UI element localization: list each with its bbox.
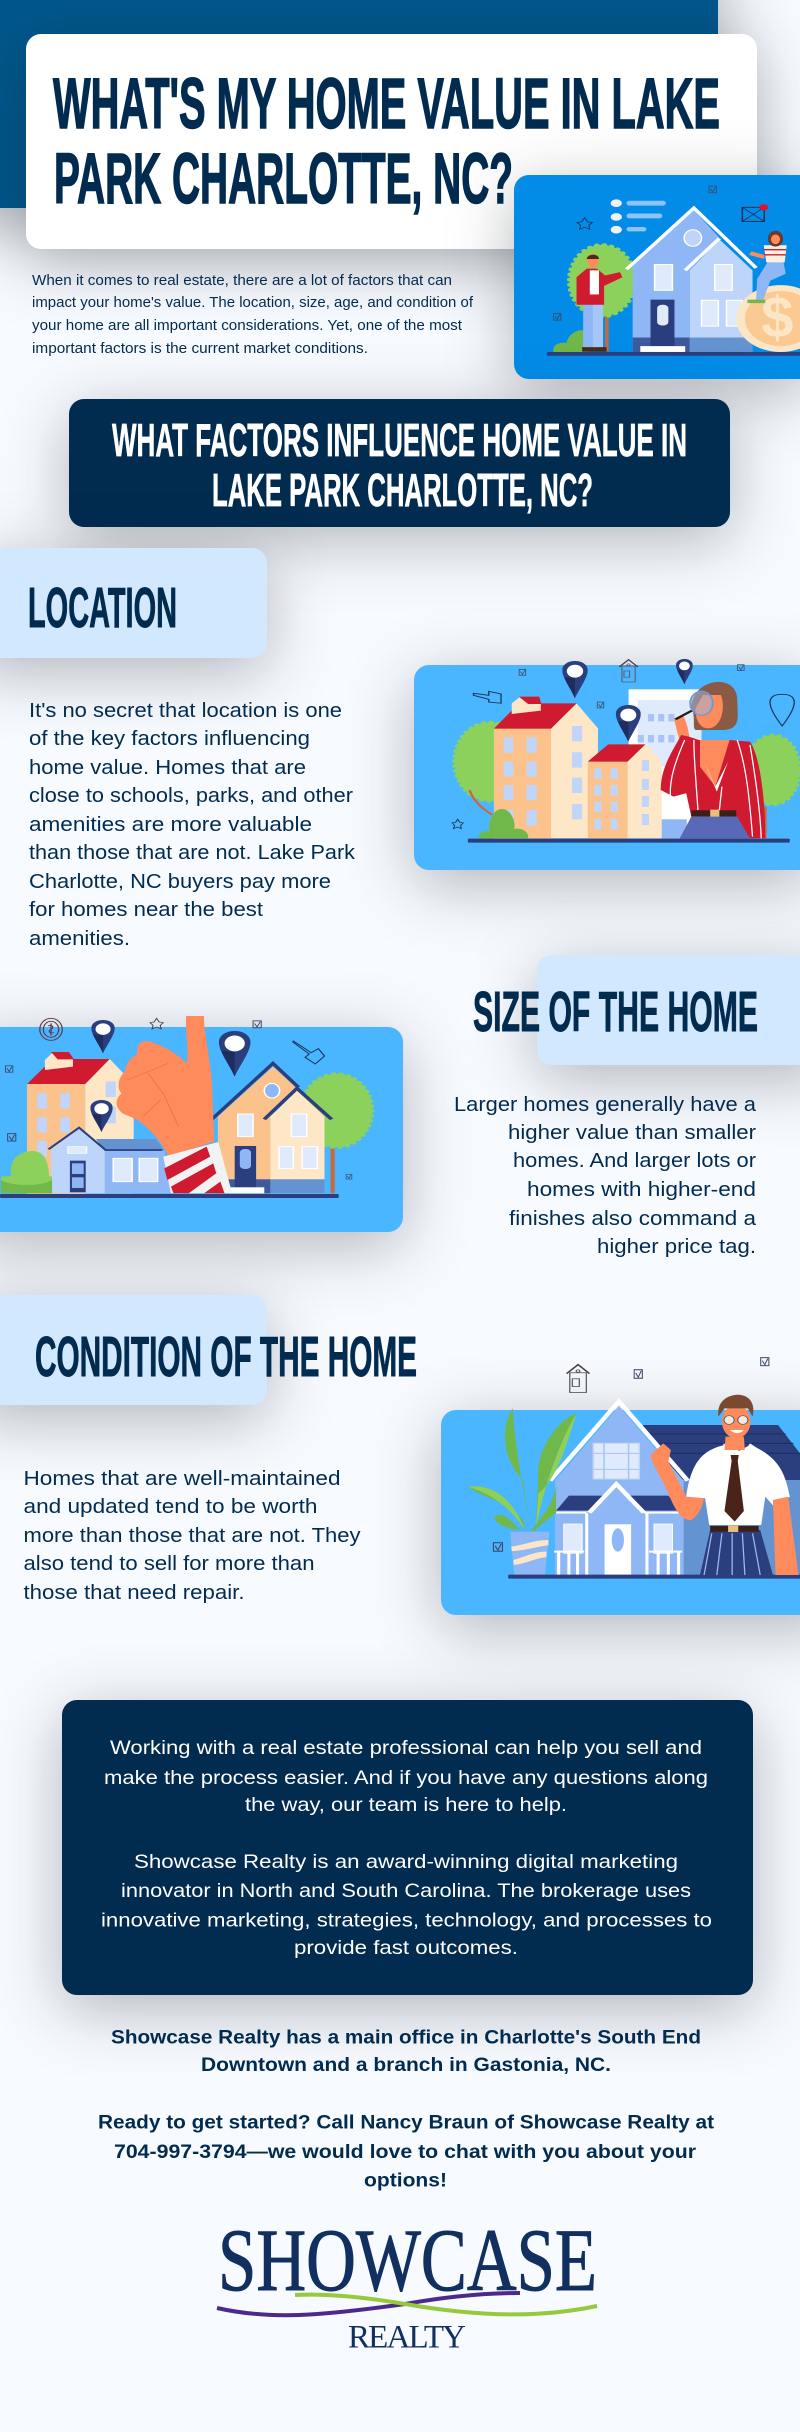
agent	[651, 1395, 798, 1575]
contact text: Downtown and a branch in Gastonia, NC.	[201, 2054, 611, 2076]
text: location: It's no secret that location is one	[29, 700, 342, 722]
ground	[0, 1194, 339, 1198]
banner heading	[112, 414, 687, 516]
building large	[494, 697, 598, 839]
intro paragraph: When it comes to real estate, there are a lot of factors that can	[32, 273, 452, 289]
contact text: options!	[364, 2170, 447, 2192]
plant	[468, 1408, 577, 1531]
panel: condition of the home	[0, 1295, 800, 1615]
man	[577, 254, 622, 352]
icon: envelope	[742, 204, 768, 221]
tab: size of the home	[537, 955, 800, 1065]
tab: condition of the home	[0, 1295, 267, 1405]
text: location: amenities are more valuable	[29, 814, 312, 836]
section banner	[69, 399, 730, 527]
hand	[117, 1016, 232, 1193]
icon: location outline	[770, 694, 794, 726]
icon: key	[293, 1041, 324, 1064]
text: size of the home: finishes also command a	[509, 1208, 757, 1230]
right house	[212, 1063, 332, 1193]
white tower	[629, 689, 702, 839]
ground	[547, 352, 800, 356]
building small	[588, 744, 662, 839]
tree	[302, 1074, 372, 1193]
icon: key	[473, 691, 501, 703]
text: condition of the home: those that need repair.	[24, 1582, 244, 1604]
text: location: amenities.	[29, 928, 130, 950]
text: size of the home: Larger homes generally have a	[454, 1094, 757, 1116]
intro paragraph: your home are all important considerations. Yet, one of the most	[32, 318, 462, 334]
woman	[661, 682, 765, 839]
bush	[479, 809, 528, 838]
closing text: make the process easier. And if you have any questions along	[104, 1767, 708, 1789]
logo: Showcase Realty: REALTY	[348, 2320, 466, 2356]
bush	[1, 1151, 52, 1193]
house	[627, 208, 756, 353]
contact text	[98, 2026, 715, 2192]
bush	[553, 330, 589, 352]
intro paragraph: important factors is the current market conditions.	[32, 341, 368, 357]
text: size of the home: higher price tag.	[597, 1236, 756, 1258]
ground	[468, 839, 790, 843]
text: location: home value. Homes that are	[29, 757, 306, 779]
illustration: agent in front of house	[441, 1358, 800, 1615]
closing text: Working with a real estate professional can help you sell and	[110, 1737, 702, 1759]
text: condition of the home: more than those that are not. They	[24, 1525, 361, 1547]
tab: location	[0, 548, 267, 658]
closing text: Showcase Realty is an award-winning digital marketing	[134, 1851, 678, 1873]
intro paragraph	[32, 273, 474, 357]
text: condition of the home	[24, 1468, 361, 1604]
logo: Showcase Realty: SHOWCASE	[218, 2212, 597, 2310]
closing text	[101, 1737, 712, 1959]
text: location: Charlotte, NC buyers pay more	[29, 871, 331, 893]
icon: star	[452, 819, 463, 829]
text: condition of the home: also tend to sell for more than	[24, 1553, 314, 1575]
text: location: for homes near the best	[29, 899, 263, 921]
building	[27, 1052, 134, 1194]
closing box	[62, 1700, 753, 1995]
text: condition of the home: Homes that are well-maintained	[24, 1468, 340, 1490]
woman	[747, 231, 787, 303]
text: location: than those that are not. Lake Park	[29, 842, 356, 864]
text: size of the home: higher value than smaller	[508, 1122, 756, 1144]
contact text: Showcase Realty has a main office in Charlotte's South End	[111, 2026, 701, 2048]
heading: condition of the home: CONDITION OF THE HOME	[35, 1325, 417, 1388]
closing text: the way, our team is here to help.	[245, 1794, 567, 1816]
pot	[510, 1532, 549, 1575]
panel: size of the home	[0, 955, 800, 1258]
tree	[569, 245, 635, 351]
contact text: Ready to get started? Call Nancy Braun of Showcase Realty at	[98, 2112, 715, 2134]
closing text: innovator in North and South Carolina. The brokerage uses	[121, 1880, 691, 1902]
text: size of the home: homes. And larger lots or	[513, 1150, 756, 1172]
icon: dollar seal	[40, 1018, 62, 1040]
header band	[0, 0, 718, 208]
text: location: of the key factors influencing	[29, 728, 310, 750]
illustration: house, couple and dollar coin	[514, 175, 800, 379]
title	[53, 65, 720, 219]
logo: Showcase Realty	[217, 2212, 597, 2356]
icon: agent list	[611, 199, 666, 234]
heading: location: LOCATION	[28, 576, 177, 639]
text: location: close to schools, parks, and other	[29, 785, 353, 807]
text: size of the home: homes with higher-end	[527, 1179, 756, 1201]
illustration: thumbs up and houses	[0, 1016, 403, 1232]
closing text: provide fast outcomes.	[294, 1937, 518, 1959]
illustration: woman with magnifier and buildings	[414, 659, 800, 870]
icon: star	[150, 1018, 163, 1029]
intro paragraph: impact your home's value. The location, size, age, and condition of	[32, 295, 474, 311]
rear roof	[640, 1425, 800, 1575]
ground	[508, 1575, 800, 1579]
small house	[48, 1128, 171, 1193]
text: location	[29, 700, 356, 950]
icon: star	[577, 218, 592, 229]
panel: location	[0, 548, 800, 950]
closing text: innovative marketing, strategies, technology, and processes to	[101, 1910, 712, 1932]
title card	[26, 34, 757, 249]
text: condition of the home: and updated tend to be worth	[24, 1496, 318, 1518]
coin	[736, 284, 800, 352]
main gable	[550, 1401, 688, 1575]
text: size of the home	[454, 1094, 757, 1258]
contact text: 704-997-3794—we would love to chat with you about your	[114, 2141, 696, 2163]
